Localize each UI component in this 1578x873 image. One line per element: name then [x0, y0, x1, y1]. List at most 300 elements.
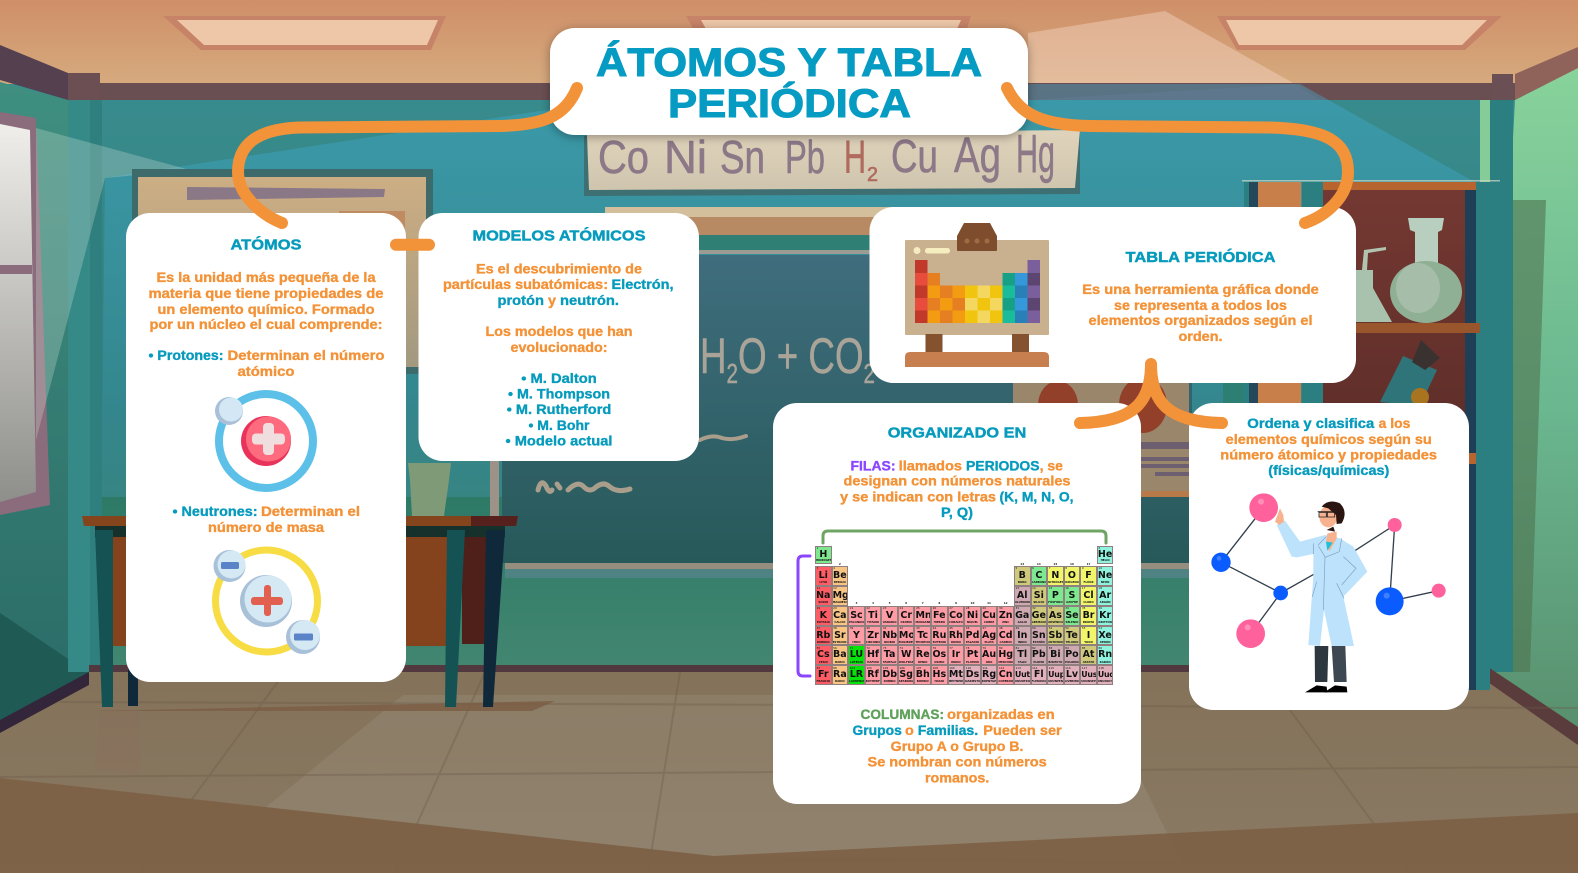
periodic table: CROMO: [901, 620, 912, 624]
text: neutrones: Determinan el: [261, 504, 360, 519]
periodic table: Br: [1083, 610, 1094, 621]
list: models: • Modelo actual: [506, 434, 612, 448]
lower wall green: [102, 497, 1478, 667]
periodic table: GALIO: [1018, 620, 1027, 624]
text: columnas: [852, 707, 1063, 786]
periodic table: Cd: [999, 630, 1013, 641]
periodic table: 17: [1087, 562, 1090, 566]
periodic table: Ca: [833, 610, 847, 621]
periodic table: Cl: [1083, 590, 1094, 601]
sign: element symbols: Co: [598, 131, 649, 183]
text: definition: se representa a todos los: [1114, 298, 1287, 313]
periodic table: XENÓN: [1100, 640, 1110, 644]
periodic table: B: [1019, 570, 1026, 581]
periodic table: SODIO: [818, 600, 828, 604]
periodic table: 52: [1065, 626, 1069, 630]
periodic table: Fl: [1034, 669, 1044, 680]
periodic table: 2: [839, 562, 841, 566]
periodic table: 44: [933, 626, 936, 630]
text: partículas: protón: [498, 293, 544, 308]
periodic table: Rb: [816, 630, 830, 641]
periodic table: Ne: [1098, 570, 1112, 581]
chalkboard: [490, 255, 1195, 578]
periodic table: Po: [1065, 649, 1079, 660]
periodic table: ESTAÑO: [1033, 640, 1045, 644]
periodic table: At: [1083, 649, 1094, 660]
periodic table: Se: [1065, 610, 1079, 621]
periodic table: Pt: [967, 649, 978, 660]
periodic table: ITRIO: [852, 640, 861, 644]
periodic table: LITIO: [819, 580, 827, 584]
periodic table: Bh: [916, 669, 930, 680]
periodic table: 72: [866, 646, 870, 650]
periodic table: N: [1051, 570, 1059, 581]
bracket: columns: [823, 531, 1106, 543]
periodic table: Nb: [882, 630, 897, 641]
periodic table: 55: [817, 646, 820, 650]
periodic table: ARSÉNICO: [1048, 620, 1064, 624]
periodic table: 34: [1065, 606, 1069, 610]
periodic table: Ir: [952, 649, 960, 660]
text: columnas: Se nombran con números: [868, 754, 1047, 770]
periodic table: 111: [982, 666, 988, 670]
periodic table: Li: [819, 570, 828, 581]
panel: tabla periódica: [870, 207, 1356, 383]
text: ordena y clasifica: número átomico y propiedades: [1220, 448, 1437, 462]
text: protones: atómico: [238, 364, 294, 379]
periodic table: RENIO: [918, 660, 927, 664]
periodic table: 51: [1049, 626, 1052, 630]
periodic table: H: [819, 549, 827, 560]
periodic table: 1: [817, 546, 818, 550]
list: models: • M. Dalton: [521, 371, 597, 386]
periodic table: Sb: [1049, 630, 1062, 641]
periodic table: 19: [817, 606, 820, 610]
periodic table: 81: [1016, 646, 1019, 650]
periodic table: 74: [899, 646, 903, 650]
periodic table: OSMIO: [934, 660, 944, 664]
connector: title to atómos: [238, 88, 577, 223]
periodic table: 103: [850, 666, 855, 670]
periodic table: Rn: [1098, 649, 1112, 660]
periodic table: 42: [899, 626, 903, 630]
periodic table: RADÓN: [1100, 660, 1111, 664]
periodic table: RADIO: [835, 679, 845, 683]
periodic table: 16: [1070, 562, 1074, 566]
list: models: • M. Bohr: [528, 418, 590, 433]
text: partículas: Es el descubrimiento de: [476, 262, 643, 276]
periodic table: LUTECIO: [850, 660, 863, 664]
title: [596, 40, 982, 126]
periodic table: ALUMINIO: [1015, 600, 1030, 604]
periodic table: 115: [1049, 666, 1054, 670]
periodic table: Xe: [1098, 630, 1112, 641]
periodic table: Ru: [932, 630, 946, 641]
periodic table: 30: [999, 606, 1003, 610]
periodic table: Ba: [833, 649, 847, 660]
periodic table: 15: [1053, 562, 1057, 566]
poster behind lower cards: [1013, 377, 1189, 497]
periodic table: 33: [1049, 606, 1052, 610]
text: filas: llamados: [899, 458, 962, 474]
periodic table: ZINC: [1002, 620, 1009, 624]
periodic table: 22: [866, 606, 870, 610]
periodic table: Mt: [949, 669, 963, 680]
text: filas: P, Q): [941, 505, 973, 520]
text: modelos: evolucionado:: [510, 340, 608, 355]
text: columnas: Pueden ser: [983, 723, 1063, 738]
periodic table: 84: [1065, 646, 1069, 650]
periodic table: Ag: [982, 630, 996, 641]
heading: modelos atómicos: MODELOS ATÓMICOS: [472, 226, 646, 244]
periodic table: 14: [1037, 562, 1041, 566]
text: ordena y clasifica: a los: [1379, 416, 1410, 431]
periodic table: 113: [1016, 666, 1021, 670]
periodic table: NEÓN: [1101, 580, 1109, 584]
periodic table: 117: [1082, 666, 1087, 670]
heading: atómos: ATÓMOS: [230, 236, 302, 254]
periodic table: Tc: [917, 630, 928, 641]
periodic table: BORO: [1018, 580, 1027, 584]
periodic table: Ra: [833, 669, 847, 680]
periodic table: Si: [1034, 590, 1044, 601]
left poster: [132, 169, 433, 374]
periodic table: FLÚOR: [1084, 580, 1094, 584]
periodic table: Fe: [933, 610, 946, 621]
periodic table: 15: [1049, 586, 1052, 590]
periodic table: 75: [916, 646, 920, 650]
text: ordena y clasifica: [1220, 416, 1437, 478]
floor: [0, 672, 1578, 873]
periodic table: Y: [853, 630, 860, 641]
periodic table: In: [1017, 630, 1027, 641]
periodic table: Ni: [967, 610, 978, 621]
tube: [1380, 340, 1440, 406]
text: modelos: [486, 324, 632, 355]
periodic table: BISMUTO: [1048, 660, 1062, 664]
periodic table: 87: [817, 666, 820, 670]
periodic table: 9: [955, 601, 957, 605]
periodic table: Pb: [1032, 649, 1046, 660]
periodic table: 7: [1049, 566, 1050, 570]
periodic table: 13: [1016, 586, 1019, 590]
periodic table: Cu: [982, 610, 996, 621]
periodic table: I: [1087, 630, 1090, 641]
periodic table: V: [886, 610, 893, 621]
periodic table: 25: [916, 606, 920, 610]
glass jar: [408, 463, 451, 516]
periodic table: HIERRO: [934, 620, 945, 624]
bracket: rows: [798, 556, 810, 676]
periodic table: 32: [1032, 606, 1036, 610]
text: neutrones: [172, 504, 360, 535]
periodic table: Be: [833, 570, 847, 581]
periodic table: 110: [966, 666, 971, 670]
periodic table: 14: [1032, 586, 1036, 590]
text: filas: PERIODOS: [966, 458, 1040, 474]
periodic table: 10: [971, 601, 974, 605]
mini table cells: [915, 260, 1040, 323]
text: filas: designan con números naturales: [844, 474, 1070, 488]
sign: element symbols: Sn: [720, 131, 765, 183]
periodic table: 27: [949, 606, 953, 610]
periodic table: Hg: [998, 649, 1013, 660]
periodic table: 12: [833, 586, 837, 590]
periodic table: 118: [1098, 666, 1104, 670]
icon: neutron atom: [214, 550, 320, 654]
title box: [550, 28, 1028, 135]
text: definition: Es una herramienta gráfica donde: [1082, 282, 1319, 297]
periodic table: CLORO: [1083, 600, 1094, 604]
periodic table: HASIO: [935, 679, 944, 683]
periodic table: BOHRIO: [917, 679, 929, 683]
sign: element symbols: Pb: [785, 131, 825, 183]
bookshelf: [1223, 180, 1500, 690]
periodic table: FRANCIO: [817, 679, 830, 683]
periodic table: 8: [1065, 566, 1067, 570]
text: filas: y se indican con letras: [840, 490, 996, 504]
panel: atómos: [126, 213, 406, 682]
periodic table: 35: [1082, 606, 1085, 610]
periodic table: S: [1069, 590, 1075, 601]
periodic table: 88: [833, 666, 837, 670]
text: definition: un elemento químico. Formado: [158, 302, 374, 317]
periodic table: 5: [889, 601, 891, 605]
text: definition: por un núcleo el cual comprende:: [150, 317, 382, 332]
left wall: [0, 82, 89, 725]
periodic table: 71: [850, 646, 853, 650]
periodic table: 7: [922, 601, 924, 605]
panel: ordena y clasifica: [1189, 403, 1469, 710]
text: ordena y clasifica: Ordena y clasifica: [1247, 416, 1375, 431]
light beam on wall: [100, 84, 1480, 620]
periodic table: Cs: [817, 649, 830, 660]
periodic table: OXÍGENO: [1065, 580, 1079, 584]
periodic table: NÍQUEL: [967, 620, 978, 624]
ceiling light centre: [686, 16, 971, 50]
heading: organizado en: ORGANIZADO EN: [888, 424, 1026, 442]
periodic table: 54: [1098, 626, 1102, 630]
periodic table: 3: [817, 566, 818, 570]
text: filas: (K, M, N, O,: [1000, 490, 1074, 504]
periodic table: PLATINO: [966, 660, 979, 664]
periodic table: BARIO: [835, 660, 845, 664]
periodic table: C: [1035, 570, 1042, 581]
text: columnas: Familias.: [918, 723, 978, 738]
periodic table: [815, 546, 1113, 685]
text: modelos: Los modelos que han: [486, 324, 632, 339]
periodic table: 82: [1032, 646, 1036, 650]
periodic table: 109: [949, 666, 955, 670]
round flask: [1390, 218, 1462, 323]
icon: proton atom: [215, 394, 313, 488]
periodic table: 18: [1098, 586, 1102, 590]
periodic table: CALCIO: [834, 620, 845, 624]
text: protones: Determinan el número: [228, 348, 384, 363]
text: definition: materia que tiene propiedades de: [148, 286, 384, 301]
periodic table: 112: [999, 666, 1004, 670]
scientist: [1275, 501, 1367, 692]
periodic table: 114: [1032, 666, 1037, 670]
periodic table: Re: [916, 649, 930, 660]
periodic table: 104: [866, 666, 872, 670]
periodic table: 78: [966, 646, 969, 650]
periodic table: LU: [850, 649, 863, 660]
icon: periodic table easel: [905, 223, 1049, 367]
periodic table: ORO: [986, 660, 992, 664]
periodic table: Na: [816, 590, 830, 601]
periodic table: 9: [1082, 566, 1084, 570]
periodic table: P: [1052, 590, 1059, 601]
periodic table: Ar: [1099, 590, 1111, 601]
title: PERIÓDICA: [668, 80, 911, 126]
periodic table: 37: [817, 626, 820, 630]
periodic table: POTASIO: [817, 620, 830, 624]
periodic table: 116: [1065, 666, 1071, 670]
sign: element symbols: Ag: [954, 127, 1001, 183]
periodic table: CESIO: [819, 660, 828, 664]
periodic table: 49: [1016, 626, 1019, 630]
periodic table: 4: [872, 601, 874, 605]
periodic table: KRIPTÓN: [1098, 620, 1112, 624]
periodic table: Ti: [868, 610, 878, 621]
periodic table: TITANIO: [867, 620, 879, 624]
periodic table: 105: [883, 666, 888, 670]
sign: element symbols: H: [844, 131, 866, 183]
text: columnas: Grupos: [852, 723, 902, 738]
window: [0, 112, 50, 515]
periodic table: Tl: [1017, 649, 1027, 660]
periodic table: CARBONO: [1032, 580, 1047, 584]
periodic table: Zr: [867, 630, 879, 641]
periodic table: LR: [850, 669, 863, 680]
periodic table: Ta: [884, 649, 895, 660]
text: protones: • Protones:: [148, 348, 224, 363]
periodic table: PLOMO: [1033, 660, 1044, 664]
text: ordena y clasifica: (físicas/químicas): [1268, 463, 1389, 478]
text: definition: [148, 270, 384, 332]
sign: element symbols: Ni: [664, 131, 707, 183]
periodic table: COBRE: [984, 620, 994, 624]
periodic table: Uut: [1015, 670, 1030, 679]
connector: title to tabla periódica: [1007, 88, 1348, 223]
right wall: [1485, 68, 1578, 745]
periodic table: Zn: [999, 610, 1012, 621]
periodic table: Sg: [899, 669, 913, 680]
periodic table: 43: [916, 626, 920, 630]
periodic table: HAFNIO: [867, 660, 879, 664]
illustration: scientist with molecule: [1211, 493, 1446, 692]
periodic table: Rf: [867, 669, 879, 680]
periodic table: NIOBIO: [884, 640, 895, 644]
text: partículas: Electrón,: [612, 277, 674, 292]
periodic table: Kr: [1099, 610, 1111, 621]
periodic table: Lv: [1066, 669, 1078, 680]
sign: element symbols: Cu: [891, 130, 938, 182]
periodic table: 76: [933, 646, 936, 650]
text: columnas: o: [905, 723, 914, 738]
periodic table: PALADIO: [966, 640, 979, 644]
periodic table: Pd: [966, 630, 979, 641]
periodic table: 10: [1098, 566, 1102, 570]
periodic table: PLATA: [984, 640, 994, 644]
periodic table: Cn: [999, 669, 1013, 680]
periodic table: Te: [1066, 630, 1078, 641]
periodic table: Hf: [867, 649, 879, 660]
periodic table: 77: [949, 646, 953, 650]
text: definition: [1082, 282, 1319, 344]
list: models: [506, 371, 612, 448]
text: definition: orden.: [1178, 329, 1222, 344]
periodic table: CADMIO: [1000, 640, 1012, 644]
list: models: • M. Thompson: [508, 386, 610, 402]
periodic table: Fr: [818, 669, 829, 680]
periodic table: 106: [899, 666, 905, 670]
periodic table: 56: [833, 646, 837, 650]
text: neutrones: número de masa: [208, 520, 325, 535]
periodic table: SELENIO: [1066, 620, 1078, 624]
periodic table: 79: [982, 646, 986, 650]
periodic table: 4: [833, 566, 835, 570]
periodic table: Ds: [966, 669, 979, 680]
periodic table: 50: [1032, 626, 1036, 630]
periodic table: POLONIO: [1065, 660, 1079, 664]
panel: modelos atómicos: [418, 213, 699, 461]
periodic table: 80: [999, 646, 1003, 650]
periodic table: TELURIO: [1066, 640, 1078, 644]
periodic table: 45: [949, 626, 953, 630]
periodic table: VANADIO: [883, 620, 897, 624]
periodic table: 39: [850, 626, 853, 630]
periodic table: Ga: [1015, 610, 1029, 621]
periodic table: TALIO: [1018, 660, 1027, 664]
periodic table: ASTATO: [1083, 660, 1094, 664]
periodic table: 41: [883, 626, 886, 630]
periodic table: RUBIDIO: [817, 640, 830, 644]
periodic table: TÁNTALO: [883, 660, 896, 664]
periodic table: RUTENIO: [933, 640, 946, 644]
periodic table: 38: [833, 626, 837, 630]
periodic table: Ge: [1032, 610, 1046, 621]
periodic table: IRIDIO: [951, 660, 961, 664]
periodic table: ARGÓN: [1100, 600, 1111, 604]
molecule bonds: [1221, 508, 1439, 634]
periodic table: Sn: [1032, 630, 1046, 641]
text: partículas: partículas subatómicas:: [443, 277, 608, 292]
erlenmeyer flask: [1356, 247, 1392, 322]
periodic table: 53: [1082, 626, 1085, 630]
chalk formula: 2: [864, 358, 875, 389]
chalk formula: H: [700, 328, 736, 384]
text: definition: Es la unidad más pequeña de la: [156, 270, 376, 285]
periodic table: 108: [933, 666, 938, 670]
periodic table: 8: [938, 601, 940, 605]
periodic table: He: [1098, 549, 1112, 560]
periodic table: YODO: [1084, 640, 1093, 644]
periodic table: Sr: [834, 630, 846, 641]
periodic table: BERILIO: [834, 580, 846, 584]
periodic table: HELIO: [1101, 558, 1110, 562]
list: models: • M. Rutherford: [507, 402, 611, 417]
text: columnas: COLUMNAS:: [860, 707, 944, 722]
periodic table: 3: [855, 601, 857, 605]
periodic table: COBALTO: [949, 620, 963, 624]
sign: element symbols: [584, 124, 1080, 196]
periodic table: O: [1068, 570, 1076, 581]
text: filas: FILAS:: [850, 458, 896, 474]
chalk squiggles: [538, 483, 630, 491]
periodic table: 48: [999, 626, 1003, 630]
